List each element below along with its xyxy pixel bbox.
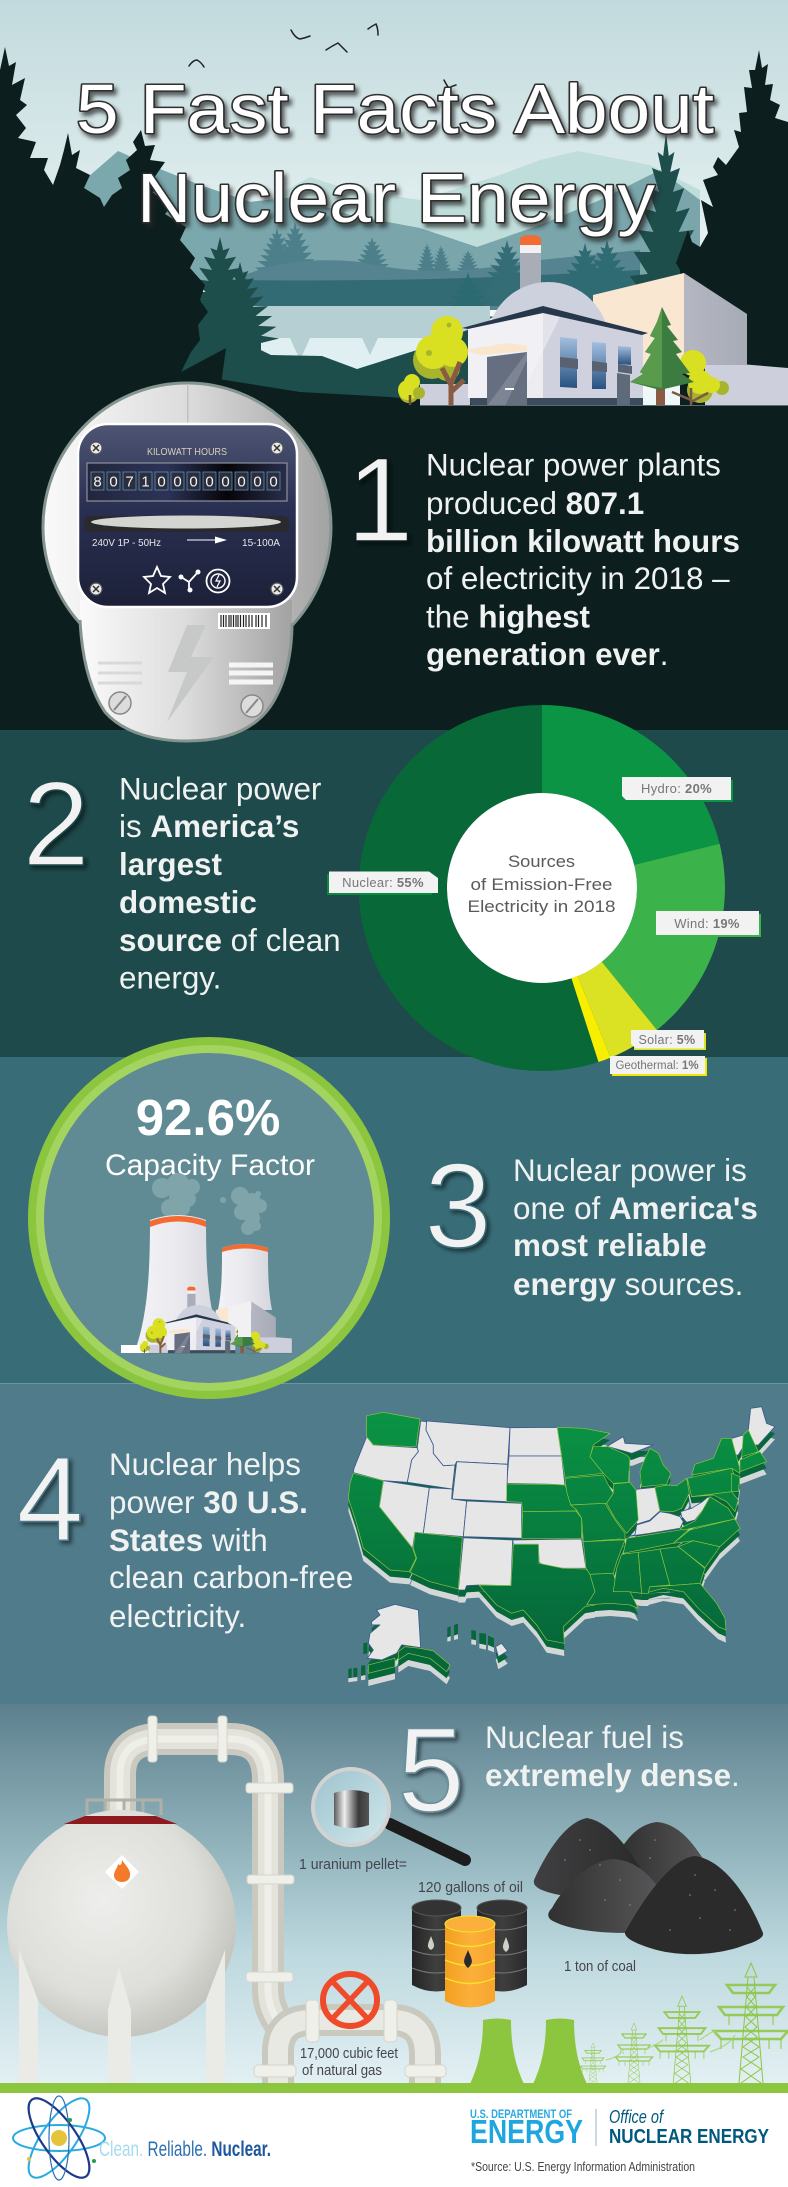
fact 2 text: domestic (119, 885, 257, 920)
label: geothermal: Geothermal: 1% (615, 1060, 699, 1072)
label: wind: Wind: 19% (674, 916, 740, 931)
tank cage (87, 1800, 161, 1815)
mountain range (50, 151, 700, 334)
label: wind (656, 911, 761, 937)
hazard diamond (105, 1855, 139, 1889)
fact 1 number: 1 (347, 433, 413, 567)
arch pipe (254, 2000, 446, 2083)
valve wheel (323, 1974, 377, 2026)
fact 3 text: Nuclear power is (513, 1153, 747, 1188)
mini plant (121, 1287, 292, 1353)
label: hydro: Hydro: 20% (641, 781, 712, 796)
natural gas caption: of natural gas (302, 2062, 382, 2079)
oil caption: 120 gallons of oil (418, 1879, 523, 1896)
donut title: Electricity in 2018 (468, 897, 616, 916)
fact 2 text: largest (119, 847, 222, 882)
fact 1 text: the highest (426, 600, 590, 634)
tank red band (64, 1816, 177, 1824)
fact 2 text: is America’s (119, 809, 299, 844)
orange barrel (445, 1916, 495, 2008)
tagline: Clean. Reliable. Nuclear. (99, 2138, 271, 2161)
title: Nuclear Energy (137, 159, 655, 237)
fact 4 text: electricity. (109, 1599, 246, 1634)
donut chart: sources of emission-free electricity (327, 705, 761, 1076)
section 3 panel (0, 1057, 788, 1383)
fact 2 text: energy. (119, 960, 221, 996)
source note: *Source: U.S. Energy Information Administration (471, 2160, 695, 2174)
meter ratings: 15-100A (242, 537, 280, 549)
label: nuclear (327, 872, 438, 895)
label: nuclear: Nuclear: 55% (342, 875, 424, 890)
smoke plumes (152, 1173, 267, 1235)
meter heading: KILOWATT HOURS (147, 447, 227, 458)
meter vents (98, 663, 273, 683)
gas tank (7, 1800, 236, 2083)
power plant illustration (398, 235, 788, 406)
fact 1 text: generation ever. (426, 637, 669, 672)
donut title (468, 852, 616, 916)
small islands (348, 1624, 494, 1682)
section 5 panel (0, 1704, 788, 2084)
lake (240, 306, 490, 368)
coal caption: 1 ton of coal (564, 1958, 636, 1975)
fact 1 text: produced 807.1 (426, 486, 644, 521)
natural gas caption (300, 2045, 399, 2079)
fact 3 number: 3 (425, 1139, 491, 1273)
natural gas caption: 17,000 cubic feet (300, 2045, 399, 2062)
foreground hills (180, 325, 480, 410)
fact 1 text: of electricity in 2018 – (426, 561, 730, 596)
meter counter (87, 463, 287, 501)
fact 2 number: 2 (23, 757, 89, 891)
fact 3 text: energy sources. (513, 1267, 743, 1302)
magnifying glass with uranium pellet (313, 1769, 465, 1860)
DOE logo: Office of (609, 2107, 665, 2127)
fact 4 text: clean carbon-free (109, 1560, 353, 1595)
arch flanges (254, 2000, 446, 2077)
meter ratings: 240V 1P - 50Hz (92, 537, 161, 549)
meter screws (90, 442, 283, 595)
title: 5 Fast Facts About (76, 70, 714, 148)
meter base screws (109, 692, 263, 717)
black barrel left (412, 1900, 461, 1992)
icon: electric meter (43, 383, 331, 741)
capacity factor badge (36, 1045, 382, 1391)
fact 4 text: Nuclear helps (109, 1447, 301, 1482)
DOE logo: ENERGY (470, 2113, 583, 2150)
forest left (0, 47, 279, 410)
meter symbols (144, 567, 230, 593)
fact 5 number: 5 (398, 1703, 464, 1837)
fact 2 text: source of clean (119, 923, 341, 958)
map: US states with nuclear power (348, 1407, 775, 1686)
fact 4 text: States with (109, 1523, 268, 1558)
label: geothermal (610, 1056, 707, 1076)
header scene (0, 0, 788, 410)
meter lightning bolt (167, 625, 214, 722)
meter ratings (92, 536, 280, 549)
pellet caption: 1 uranium pellet= (299, 1856, 407, 1873)
oil barrels (412, 1900, 527, 2008)
black barrel right (477, 1900, 527, 1992)
donut title: Sources (508, 852, 575, 871)
capacity value: 92.6% (136, 1089, 280, 1146)
slice: geothermal (571, 976, 611, 1062)
fact 4 text: power 30 U.S. (109, 1485, 308, 1520)
DOE logo (470, 2107, 770, 2150)
meter counter: 807100000000 (93, 474, 278, 490)
slice: wind (602, 844, 725, 1030)
ground strip (0, 2083, 788, 2093)
fact 2 text: Nuclear power (119, 772, 321, 806)
coal piles (534, 1818, 763, 1954)
slice: hydro (542, 705, 720, 865)
tank body (7, 1810, 236, 2037)
fact 3 text: one of America's (513, 1191, 758, 1226)
meter barcode (218, 613, 270, 629)
tank pipe (120, 1739, 292, 2038)
donut title: of Emission-Free (470, 875, 612, 894)
section 1 panel (0, 405, 788, 730)
footer panel (0, 2093, 788, 2187)
icon: atom logo (13, 2090, 105, 2186)
capacity label: Capacity Factor (105, 1149, 315, 1182)
fact 5 text: extremely dense. (485, 1758, 740, 1793)
green cooling towers (470, 2018, 587, 2084)
donut centre (447, 793, 637, 983)
fact 1 text: Nuclear power plants (426, 448, 721, 482)
birds (189, 24, 456, 88)
pipe flanges (148, 1716, 294, 1982)
slice: solar (578, 962, 657, 1058)
tank legs (19, 1950, 225, 2083)
meter disc slot (84, 516, 289, 532)
section 2 panel (0, 730, 788, 1057)
forest right (627, 50, 788, 410)
transmission pylons (580, 1963, 788, 2084)
label: solar (631, 1030, 706, 1050)
title (76, 70, 714, 237)
fact 1 text: billion kilowatt hours (426, 524, 740, 559)
fact 5 text: Nuclear fuel is (485, 1720, 684, 1755)
fact 4 number: 4 (17, 1432, 83, 1566)
cooling towers (137, 1215, 272, 1345)
label: hydro (622, 777, 733, 802)
DOE logo: U.S. DEPARTMENT OF (470, 2107, 572, 2121)
label: solar: Solar: 5% (639, 1033, 695, 1047)
slice: nuclear (359, 705, 598, 1071)
section 4 panel (0, 1383, 788, 1704)
fact 3 text: most reliable (513, 1228, 707, 1263)
